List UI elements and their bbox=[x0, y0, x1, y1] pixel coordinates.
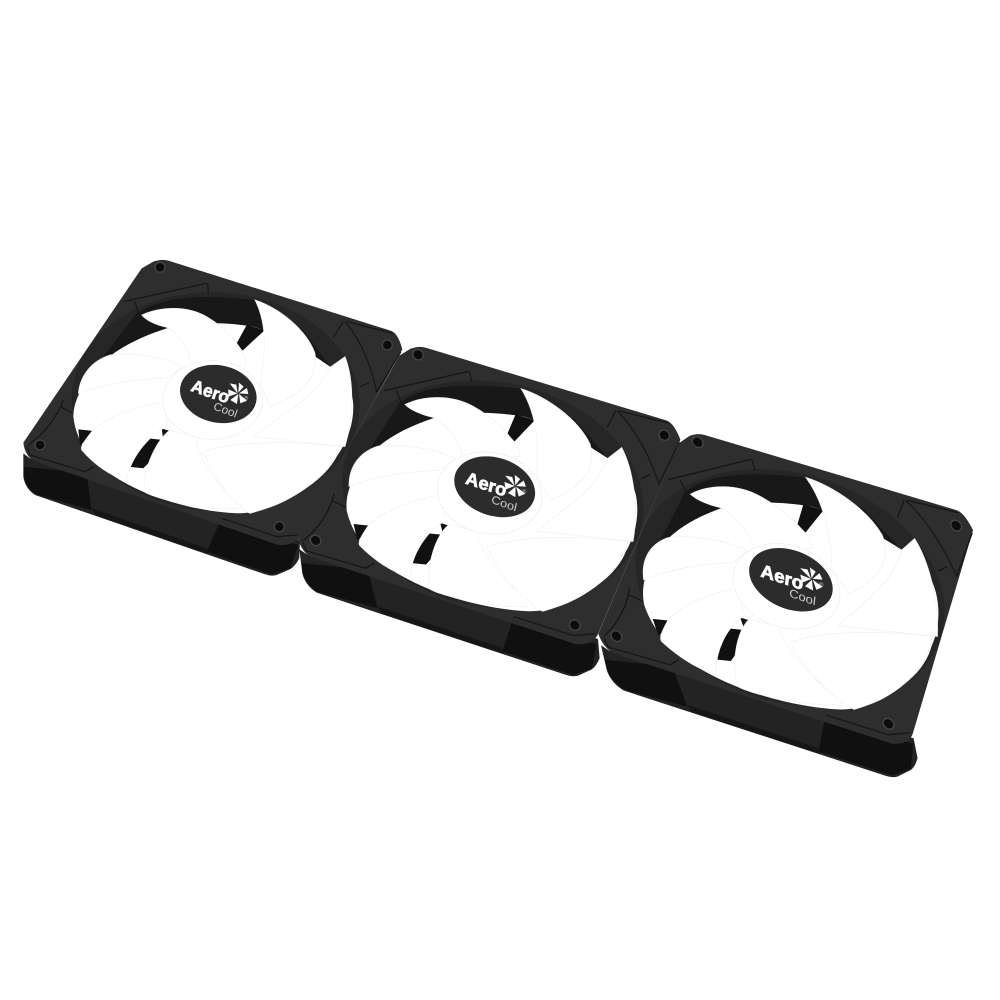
fan 2 logo: Aero bbox=[464, 468, 508, 500]
fan 3 logo: Cool bbox=[789, 586, 817, 608]
fan 1 frame, blades and hub bbox=[23, 260, 402, 576]
fan 1 logo: Cool bbox=[212, 401, 239, 421]
fan 3 logo: Aero bbox=[760, 560, 804, 594]
fan 3 frame, blades and hub bbox=[552, 433, 1000, 778]
fan 1 logo bbox=[189, 376, 248, 421]
fan 2 logo: Cool bbox=[490, 492, 518, 514]
fan 2 frame, blades and hub bbox=[275, 346, 709, 677]
fan 2 (middle) bbox=[275, 346, 709, 677]
fan 1 logo: Aero bbox=[189, 376, 232, 407]
fan 1 (left) bbox=[23, 260, 402, 576]
fan 3 logo bbox=[755, 560, 830, 609]
fan 3 (right) bbox=[552, 433, 1000, 778]
fan 2 logo: ® bbox=[522, 488, 528, 495]
fan 2 logo bbox=[462, 468, 530, 514]
fan 1 logo: ® bbox=[244, 395, 248, 402]
fan 3 logo: ® bbox=[819, 581, 825, 588]
